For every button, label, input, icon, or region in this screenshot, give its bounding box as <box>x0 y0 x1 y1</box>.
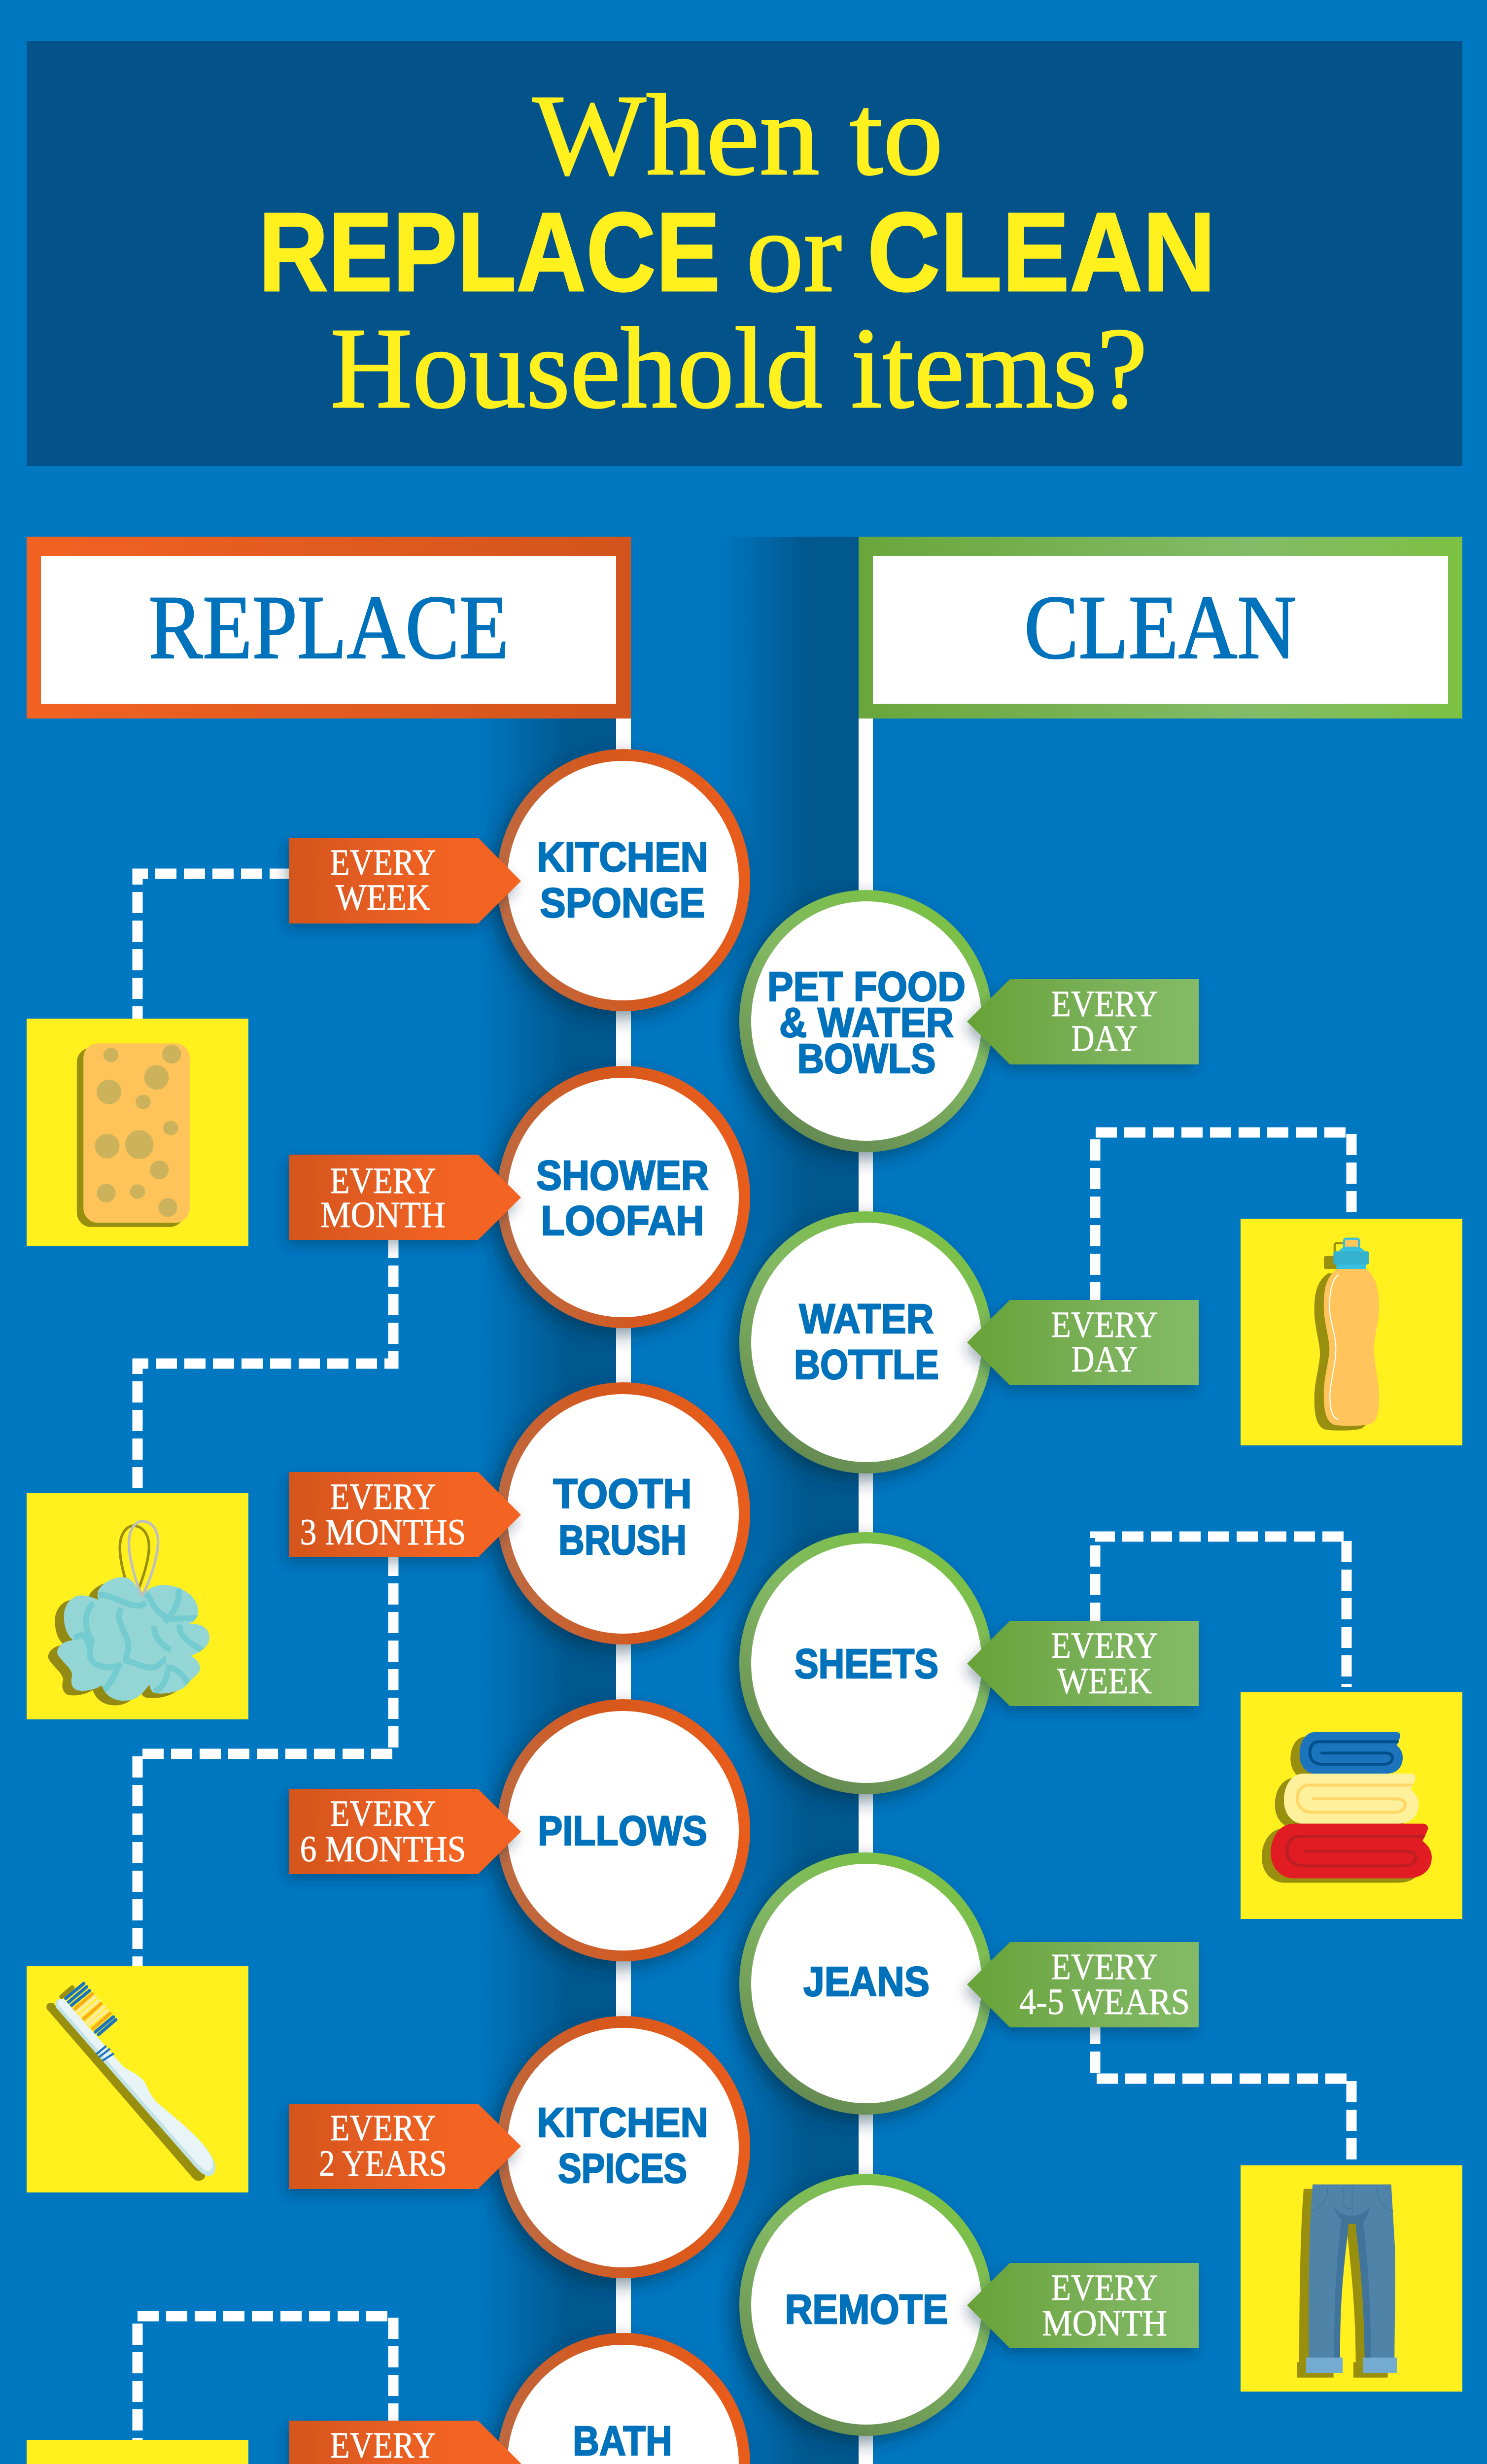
circle: water bottle: BOTTLE <box>794 1341 939 1388</box>
circle: shower loofah: SHOWER <box>536 1152 709 1198</box>
circle: remote: REMOTE <box>785 2286 948 2332</box>
circle: remote <box>739 2174 993 2436</box>
tag: every 2 years spices: 2 YEARS <box>319 2143 447 2184</box>
tag: every 2 years towels <box>289 2421 521 2464</box>
icon: jeans <box>1241 2165 1462 2392</box>
title line 2: or <box>746 188 842 316</box>
tag: every 3 months: EVERY <box>330 1476 436 1517</box>
tag: every day bowls <box>967 979 1199 1064</box>
tag: every week <box>289 838 521 924</box>
circle: jeans: JEANS <box>803 1958 930 2005</box>
tag: every week sheets: EVERY <box>1051 1625 1158 1666</box>
timeline line: clean <box>859 719 873 2464</box>
title line 2 <box>258 188 1215 316</box>
connector: sheets <box>1095 1537 1347 1687</box>
circle: kitchen spices <box>497 2016 750 2278</box>
tag: every 3 months: 3 MONTHS <box>300 1512 466 1553</box>
circle: sheets <box>739 1532 993 1794</box>
circle: sheets: SHEETS <box>795 1641 938 1687</box>
tag: every month: EVERY <box>330 1161 436 1201</box>
icon: towel on rail <box>27 2440 248 2464</box>
icon: toothbrush <box>27 1966 248 2192</box>
title line 3: Household items? <box>330 304 1147 432</box>
circle: tooth brush <box>497 1382 750 1644</box>
tag: every 4-5 wears: EVERY <box>1051 1947 1158 1987</box>
tag: every 6 months: 6 MONTHS <box>300 1829 466 1870</box>
circle: kitchen spices: KITCHEN <box>537 2099 708 2146</box>
panel: clean header <box>859 537 1462 719</box>
circle: kitchen spices: SPICES <box>558 2145 687 2191</box>
icon: sponge <box>27 1019 248 1246</box>
tag: every week sheets: WEEK <box>1057 1661 1152 1702</box>
heading: replace: REPLACE <box>149 577 509 678</box>
tag: every month remote: EVERY <box>1051 2267 1158 2308</box>
circle: pillows: PILLOWS <box>538 1808 707 1854</box>
tag: every month remote <box>967 2263 1199 2348</box>
circle: bath towels: BATH <box>573 2418 672 2464</box>
circle: tooth brush: TOOTH <box>553 1471 692 1517</box>
tag: every day bowls: EVERY <box>1051 984 1158 1025</box>
tag: every week: WEEK <box>336 877 430 918</box>
circle: kitchen sponge: SPONGE <box>540 880 705 926</box>
connector: towels <box>138 2316 393 2440</box>
tag: every 4-5 wears <box>967 1942 1199 2027</box>
connector: sponge <box>138 874 291 1019</box>
icon: loofah <box>27 1493 248 1719</box>
tag: every month: MONTH <box>320 1195 446 1235</box>
tag: every month <box>289 1155 521 1240</box>
circle: pillows <box>497 1699 750 1961</box>
tag: every day bottle <box>967 1300 1199 1385</box>
tag: every day bottle: EVERY <box>1051 1304 1158 1345</box>
panel: replace header <box>27 537 631 719</box>
connector: bottle <box>1095 1132 1351 1303</box>
title line 2: REPLACE <box>258 190 721 315</box>
circle: pet food and water bowls: BOWLS <box>797 1035 935 1082</box>
connector: jeans <box>1095 2023 1351 2165</box>
tag: every 3 months <box>289 1472 521 1557</box>
title banner <box>27 41 1462 466</box>
circle: water bottle <box>739 1211 993 1473</box>
circle: bath towels <box>497 2333 750 2464</box>
circle: pet food and water bowls: PET FOOD <box>767 963 966 1010</box>
circle: pet food and water bowls <box>739 890 993 1152</box>
circle: shower loofah: LOOFAH <box>541 1198 704 1244</box>
tag: every week sheets <box>967 1621 1199 1706</box>
circle: water bottle: WATER <box>799 1296 934 1342</box>
tag: every day bowls: DAY <box>1072 1018 1138 1059</box>
tag: every day bottle: DAY <box>1072 1339 1138 1380</box>
icon: water bottle <box>1241 1219 1462 1445</box>
icon: folded sheets <box>1241 1692 1462 1919</box>
tag: every 6 months: EVERY <box>330 1793 436 1834</box>
tag: every 2 years spices <box>289 2104 521 2189</box>
circle: pet food and water bowls: & WATER <box>779 999 954 1046</box>
tag: every 2 years spices: EVERY <box>330 2108 436 2149</box>
connector: loofah <box>138 1237 393 1493</box>
title line 1: When to <box>532 71 943 199</box>
circle: tooth brush: BRUSH <box>558 1517 687 1563</box>
tag: every 4-5 wears: 4-5 WEARS <box>1019 1982 1190 2022</box>
connector: toothbrush <box>138 1555 393 1966</box>
tag: every week: EVERY <box>330 842 436 883</box>
tag: every month remote: MONTH <box>1042 2303 1167 2344</box>
tag: every 6 months <box>289 1789 521 1874</box>
center shadow bands <box>473 537 860 2464</box>
timeline line: replace <box>616 719 631 2464</box>
circle: kitchen sponge: KITCHEN <box>537 834 708 880</box>
heading: clean: CLEAN <box>1024 577 1296 678</box>
circle: shower loofah <box>497 1066 750 1328</box>
title line 2: CLEAN <box>867 190 1215 315</box>
circle: kitchen sponge <box>497 749 750 1011</box>
circle: jeans <box>739 1852 993 2115</box>
